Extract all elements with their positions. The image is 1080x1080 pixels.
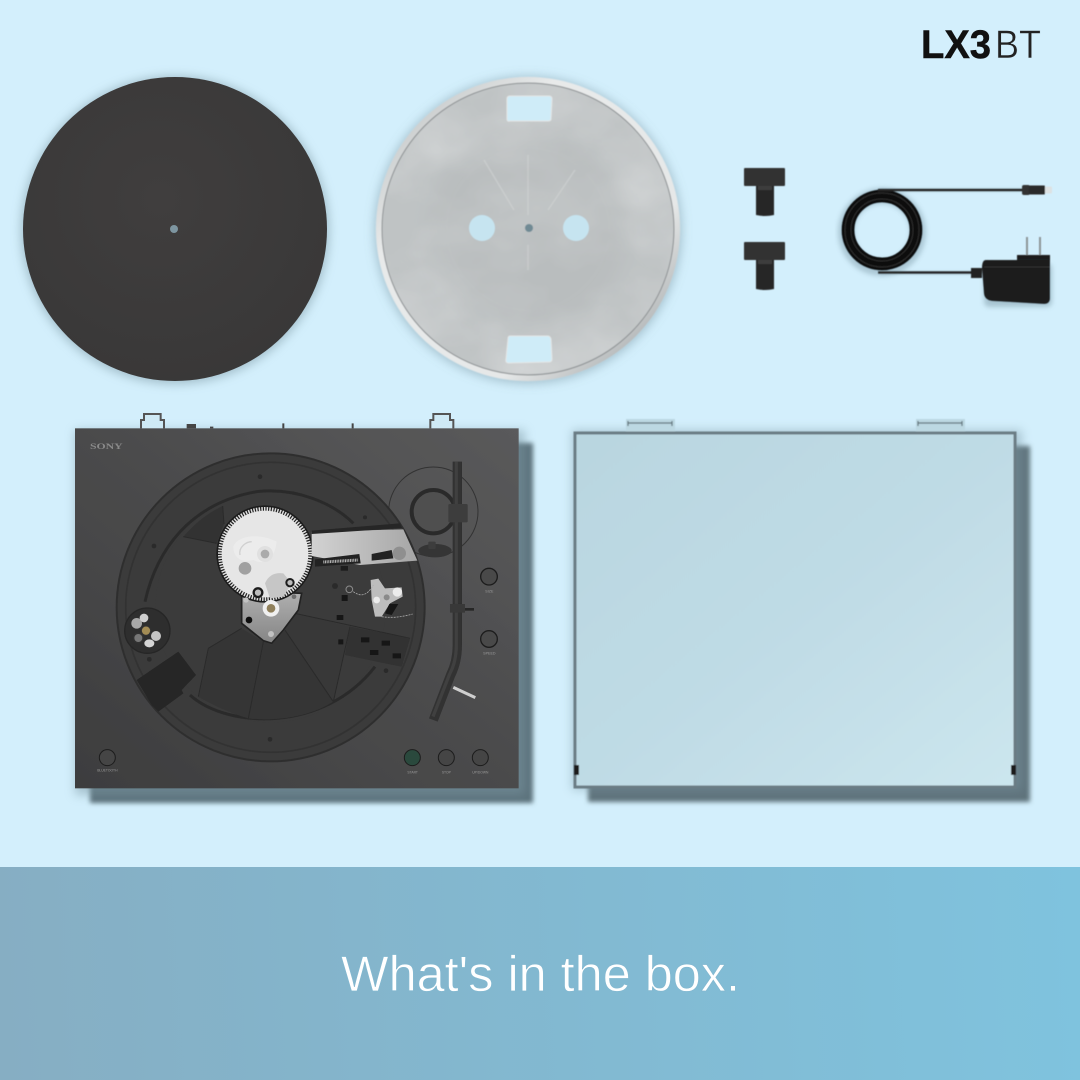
platter spindle hole	[525, 224, 533, 232]
vent holes	[337, 595, 401, 658]
rear connectors	[187, 423, 354, 428]
slide bar mechanism	[312, 523, 417, 571]
start button	[404, 750, 420, 774]
platter left hole	[469, 215, 495, 241]
up down button	[472, 750, 489, 774]
black platter mat	[21, 76, 329, 384]
platter top slot	[507, 96, 552, 121]
right linkage bracket	[332, 579, 413, 617]
up down button: UP/DOWN	[472, 770, 489, 774]
bluetooth button	[97, 750, 118, 773]
stop button: STOP	[442, 770, 452, 774]
mat spindle hole	[170, 225, 178, 233]
rib lines	[183, 506, 410, 718]
SONY logo: SONY	[90, 442, 123, 451]
power adapter and cable	[845, 185, 1052, 307]
caption: What's in the box.	[341, 946, 740, 1002]
caption band	[0, 867, 1080, 1080]
platter right hole	[563, 215, 589, 241]
dust cover shadow	[572, 430, 1030, 802]
chassis	[75, 428, 519, 788]
lid hinge right	[916, 419, 965, 432]
dust cover	[574, 419, 1016, 787]
dark wedge lower	[198, 628, 263, 718]
hinge left	[141, 414, 164, 428]
adapter body	[982, 260, 1050, 304]
tonearm	[433, 462, 475, 720]
bluetooth button: BLUETOOTH	[97, 769, 118, 773]
screws	[147, 474, 388, 742]
plate details	[243, 573, 296, 637]
dark wedge upper	[183, 506, 224, 543]
platter well	[117, 453, 425, 761]
tonearm base disc outline	[389, 467, 478, 556]
hinge right	[430, 414, 453, 428]
logo: LX3BT: LX3	[921, 23, 991, 67]
start button: START	[407, 770, 418, 774]
gear support plate	[242, 592, 302, 643]
size knob	[481, 568, 497, 594]
logo: LX3BT	[921, 23, 1041, 67]
cue lever	[453, 687, 475, 698]
rubber foot pieces	[744, 168, 785, 290]
speed knob: SPEED	[483, 652, 496, 656]
lid hinge left	[626, 419, 675, 432]
black motor cover	[137, 652, 196, 712]
spindle gear wheel	[216, 505, 314, 603]
well inner rim	[145, 491, 353, 602]
size knob: SIZE	[485, 590, 494, 594]
tonearm base	[412, 490, 455, 557]
turntable shadow	[75, 430, 533, 803]
speed change hub	[125, 608, 170, 653]
logo: LX3BT: BT	[995, 23, 1041, 67]
adapter prongs	[1027, 237, 1040, 256]
vent panel	[345, 627, 410, 667]
aluminium platter	[374, 76, 682, 384]
speed knob	[481, 631, 497, 656]
cable connector	[1022, 185, 1030, 195]
turntable (drawn in zoom coords)	[75, 414, 519, 788]
lid corner clips	[574, 765, 1016, 775]
stop button	[438, 750, 454, 774]
platter bottom slot	[506, 336, 552, 363]
